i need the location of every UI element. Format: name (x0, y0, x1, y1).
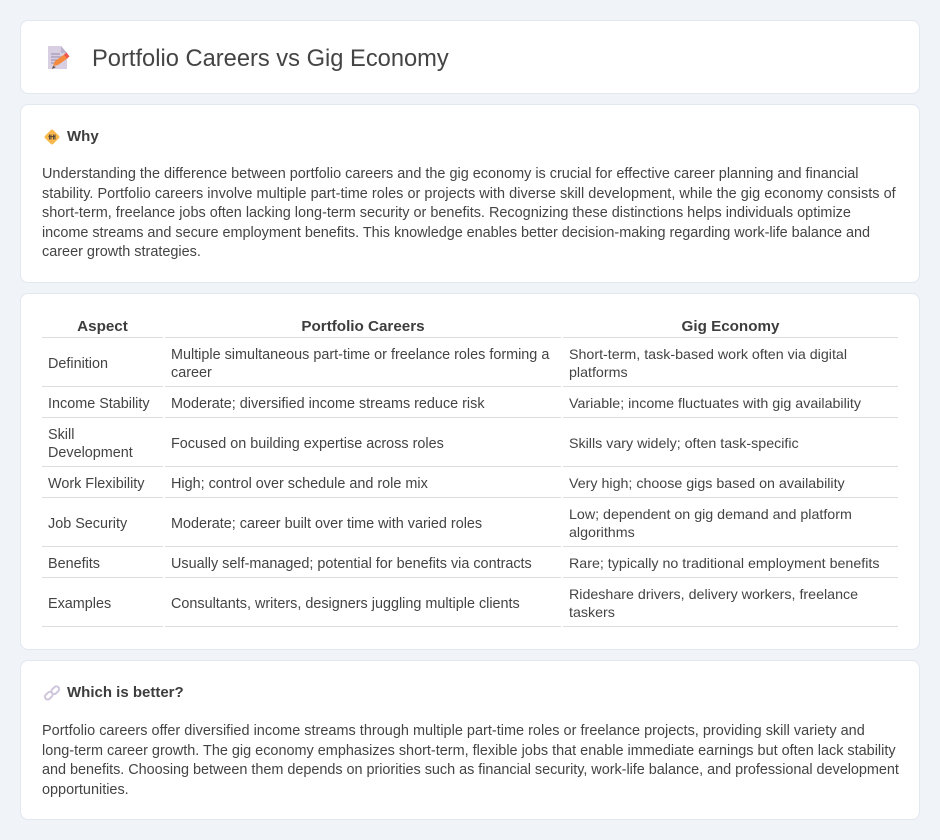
heading: which is better: Which is better? (67, 684, 184, 701)
text: why paragraph: income streams and secure employment benefits. This knowledge enables better decision-making regarding work-life balance and (42, 224, 870, 240)
comparison table: Variable; income fluctuates with gig availability (569, 396, 861, 412)
comparison table: Consultants, writers, designers juggling multiple clients (171, 596, 520, 612)
comparison table: Skill (48, 427, 74, 443)
text: which is better paragraph: long-term career growth. The gig economy emphasizes short-term, flexible jobs that enable immediate earnings but often lack stability (42, 742, 896, 758)
comparison table: Aspect (77, 318, 128, 335)
text: why paragraph: Understanding the difference between portfolio careers and the gig economy is crucial for effective career planning and financial (42, 166, 858, 182)
comparison table (42, 318, 898, 627)
comparison table: Income Stability (48, 396, 150, 412)
comparison table: Usually self-managed; potential for benefits via contracts (171, 556, 532, 572)
comparison table: Benefits (48, 556, 100, 572)
comparison table: Rideshare drivers, delivery workers, freelance (569, 587, 858, 603)
comparison table: High; control over schedule and role mix (171, 476, 428, 492)
comparison table: Gig Economy (682, 318, 779, 335)
comparison table: Low; dependent on gig demand and platform (569, 507, 852, 523)
panel: title card (20, 20, 920, 94)
text: which is better paragraph: Portfolio careers offer diversified income streams through multiple part-time roles or freelance projects, providing skill variety and (42, 723, 865, 739)
text: why paragraph: career growth strategies. (42, 244, 201, 260)
text: why paragraph: stability. Portfolio careers involve multiple part-time roles or projects with diverse skill development, while the gig economy consists of (42, 186, 896, 202)
text: which is better paragraph (42, 723, 899, 798)
text: which is better paragraph: and benefits. Choosing between them depends on priorities such as financial security, work-life balance, and professional development (42, 762, 899, 778)
comparison table: Multiple simultaneous part-time or freelance roles forming a (171, 347, 549, 363)
text: which is better paragraph: opportunities. (42, 782, 129, 798)
comparison table: Skills vary widely; often task-specific (569, 436, 799, 452)
comparison table: Work Flexibility (48, 476, 144, 492)
icon: chain link (44, 685, 60, 700)
panel: why (20, 104, 920, 283)
comparison table: Job Security (48, 516, 127, 532)
panel: comparison card (20, 293, 920, 650)
comparison table: career (171, 365, 212, 381)
comparison table: Very high; choose gigs based on availability (569, 476, 845, 492)
panel: which is better (20, 660, 920, 820)
heading: why: Why (67, 128, 99, 145)
comparison table: Development (48, 445, 133, 461)
comparison table: platforms (569, 365, 628, 381)
comparison table: Short-term, task-based work often via digital (569, 347, 847, 363)
comparison table: Rare; typically no traditional employment benefits (569, 556, 880, 572)
comparison table: Portfolio Careers (301, 318, 425, 335)
comparison table: Focused on building expertise across roles (171, 436, 444, 452)
comparison table: taskers (569, 605, 615, 621)
comparison table: Moderate; diversified income streams reduce risk (171, 396, 485, 412)
comparison table: Moderate; career built over time with varied roles (171, 516, 482, 532)
text: why paragraph: short-term, freelance jobs often lacking long-term security or benefits. Recognizing these distinctions helps individuals optimize (42, 205, 851, 221)
comparison table: algorithms (569, 525, 635, 541)
icon: document with pencil (48, 46, 70, 69)
text: why paragraph (42, 166, 896, 260)
icon: road sign diamond (44, 130, 60, 144)
comparison table: Examples (48, 596, 111, 612)
comparison table: Definition (48, 356, 108, 372)
title: Portfolio Careers vs Gig Economy (92, 46, 449, 72)
